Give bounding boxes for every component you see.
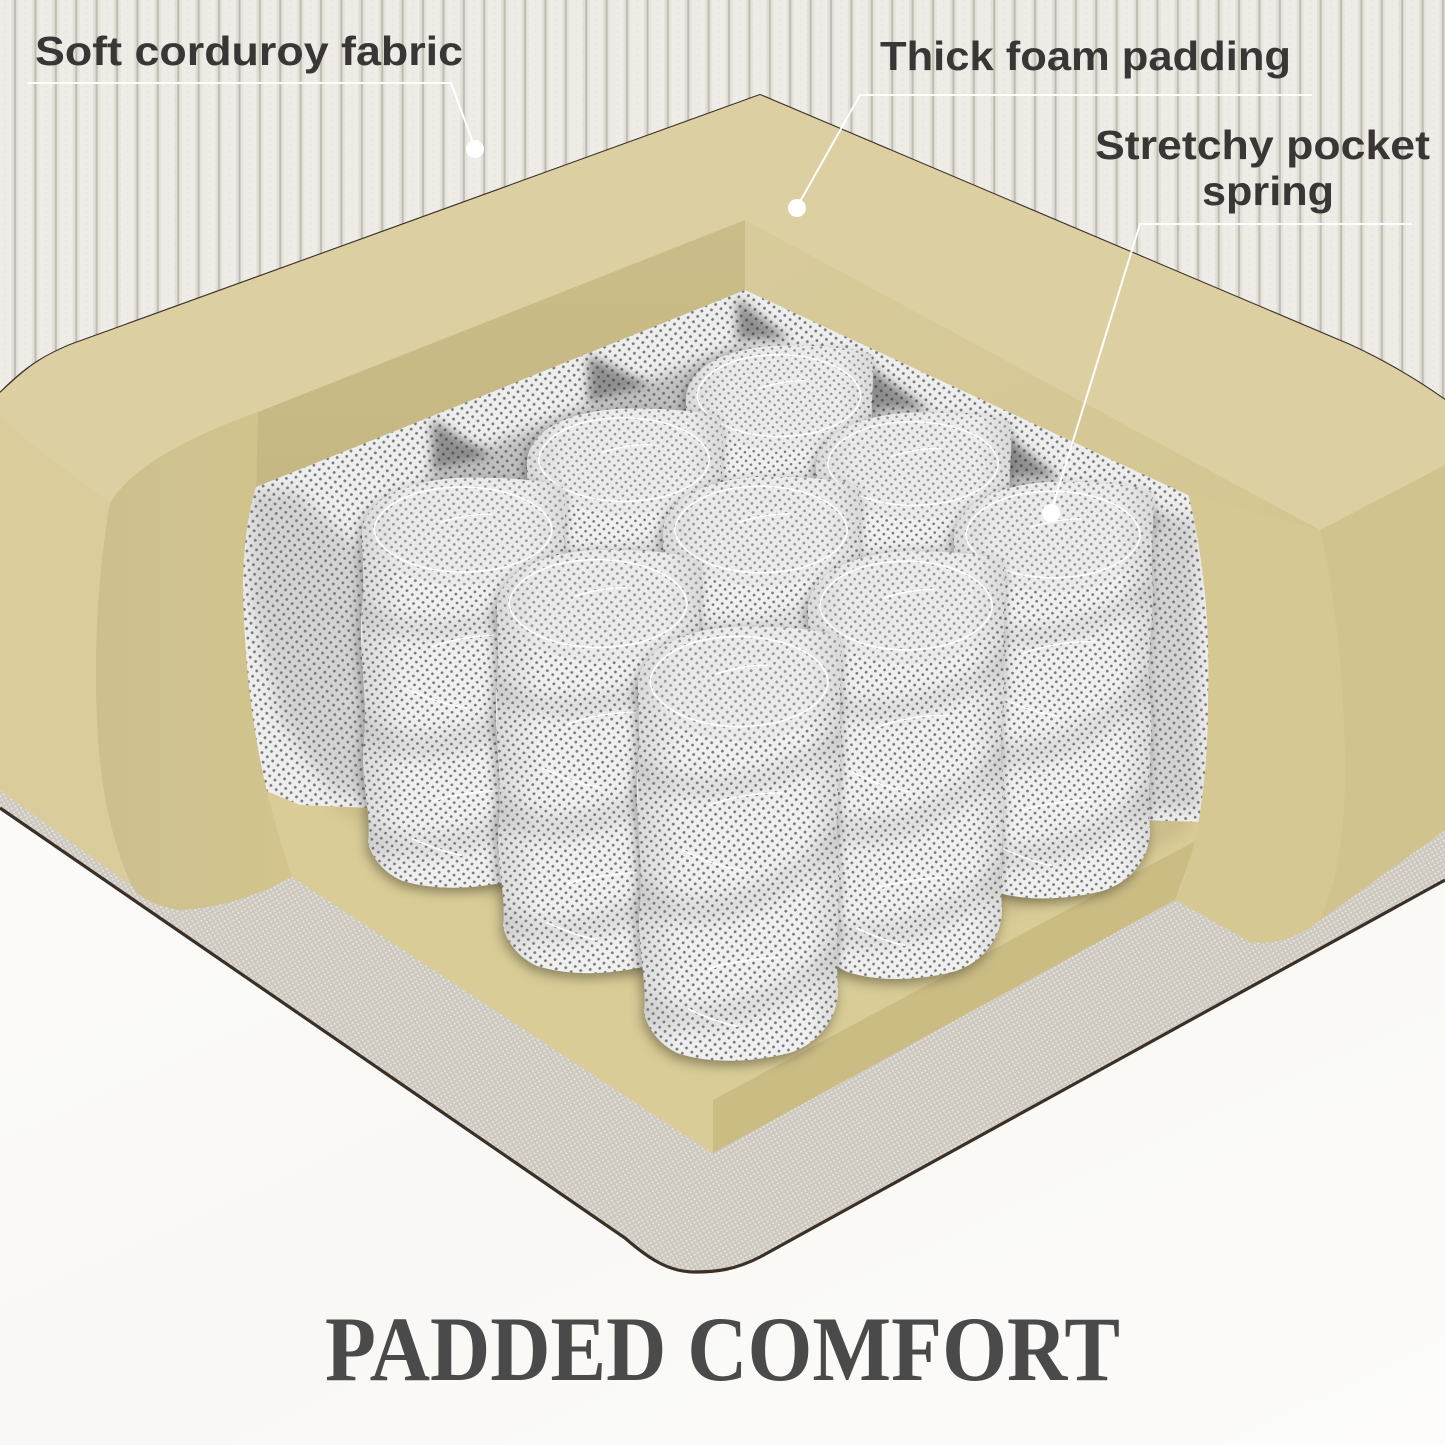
back wall pockets (240, 280, 1215, 822)
dark notches between pockets (432, 298, 1060, 478)
label line 1: Stretchy pocket (1095, 122, 1430, 168)
callout: stretchy pocket spring (1042, 122, 1430, 522)
left pocket shadow (250, 490, 372, 800)
right foam inner block (1175, 494, 1345, 943)
leader line (27, 83, 475, 148)
spring centre (653, 473, 867, 910)
foam top surface (0, 95, 1445, 530)
marker dot (466, 140, 484, 158)
left foam inner block (96, 412, 292, 910)
shadow on base foam (320, 800, 1190, 1030)
base foam top (255, 790, 1205, 1153)
spring row 2 left (517, 405, 729, 828)
base fabric layer (0, 700, 1445, 1272)
fabric outline on top (0, 95, 1445, 400)
label line 2: spring (1202, 168, 1334, 214)
spring left (352, 474, 572, 904)
spring front left (487, 546, 707, 990)
background: white lower area (0, 780, 1445, 1445)
spring row 2 right (806, 409, 1018, 832)
right foam front face (1318, 465, 1445, 922)
foam inner walls and blocks (96, 220, 1445, 943)
outline lower (0, 808, 1445, 1272)
back wall left (256, 220, 745, 487)
title: PADDED COMFORT (325, 1298, 1120, 1400)
back pocket shadow (420, 345, 1170, 580)
leader line (1051, 224, 1412, 512)
leader line (797, 95, 1312, 207)
background: corduroy fabric (0, 0, 1445, 500)
foam back fill (0, 95, 1445, 1153)
spring front right (798, 548, 1012, 996)
marker dot (788, 199, 806, 217)
left foam front face (0, 415, 130, 885)
spring back (677, 342, 879, 756)
pocket springs (352, 342, 1160, 1078)
marker dot (1042, 504, 1060, 522)
label: Soft corduroy fabric (35, 28, 463, 74)
right pocket shadow (1145, 510, 1200, 810)
base foam side (713, 840, 1197, 1153)
back layer of spring pockets (240, 280, 1215, 822)
back wall right (745, 220, 1320, 560)
spring right (944, 478, 1160, 915)
grey fabric between block and base foam (130, 830, 1445, 1272)
callout: soft corduroy fabric (27, 28, 484, 158)
label: Thick foam padding (880, 33, 1291, 79)
callout: thick foam padding (788, 33, 1312, 217)
spring front (628, 623, 848, 1078)
